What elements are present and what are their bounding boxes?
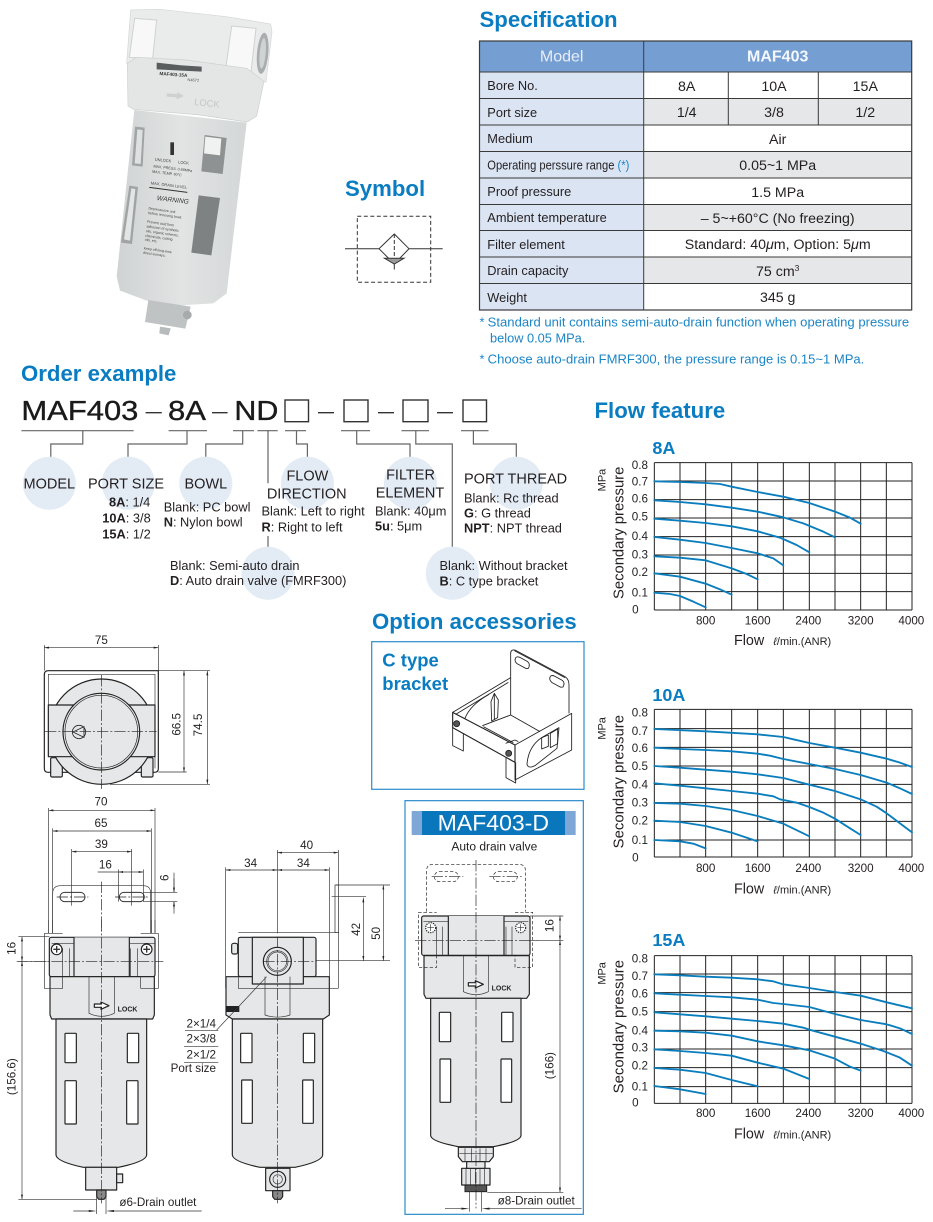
chart: 8A flow: MPa — [597, 468, 609, 491]
drawing: front view of filter — [5, 920, 202, 1214]
chart: 10A flow: 0.8 — [632, 707, 648, 720]
specification table: Proof pressure — [487, 184, 571, 199]
chart: 10A flow: ℓ/min.(ANR) — [772, 884, 831, 896]
dimensions: auto drain filter: (166) — [543, 1052, 556, 1079]
product photo: filter unit: adhesion of synthetic — [146, 224, 179, 233]
drawing: side view of filter: 2×1/4 — [186, 1017, 217, 1030]
order code: MAF403 — [21, 395, 138, 426]
drawing: side view of filter: 2×3/8 — [186, 1033, 216, 1046]
specification table: Model — [540, 48, 583, 66]
heading: Flow feature: Flow feature — [594, 398, 725, 423]
chart: 10A flow: 0.1 — [632, 834, 648, 847]
table footnotes — [480, 315, 909, 366]
chart: 8A flow: Flow — [734, 633, 765, 649]
specification table: Medium — [487, 131, 533, 146]
title band: MAF403-D — [412, 811, 576, 836]
panel: C type bracket: bracket — [382, 673, 448, 694]
chart: 8A flow: 0.8 — [632, 459, 648, 472]
product photo: filter unit: UNLOCK — [155, 157, 172, 163]
specification table: Air — [769, 132, 787, 148]
product photo: filter unit: MAX. DRAIN LEVEL — [151, 180, 188, 190]
heading: Specification: Specification — [480, 7, 618, 32]
specification table: Standard: 40μm, Option: 5μm — [685, 237, 871, 253]
chart: 10A flow: Flow — [734, 881, 765, 897]
chart: 8A flow: 8A — [652, 438, 675, 458]
table footnotes: Choose auto-drain FMRF300, the pressure range is 0.15~1 MPa. — [488, 351, 864, 366]
drawing: front view dimensions — [49, 796, 177, 933]
product photo: filter unit: N4672 — [187, 77, 200, 83]
specification table: 0.05~1 MPa — [739, 158, 816, 174]
chart: 8A flow: 0.4 — [632, 530, 649, 543]
order labels: Blank: Without bracket — [440, 558, 568, 573]
chart: 8A flow: 0.7 — [632, 475, 648, 488]
specification table: 3 — [795, 263, 800, 273]
product photo: filter unit — [117, 9, 272, 335]
order labels: R: Right to left — [262, 520, 343, 535]
order labels: 15A: 1/2 — [102, 526, 151, 541]
specification table: Weight — [487, 290, 527, 305]
order labels: Blank: Semi-auto drain — [170, 558, 299, 573]
panel: C type bracket: C type — [382, 650, 439, 671]
chart: 15A flow: 15A — [652, 930, 685, 950]
chart: 10A flow: 0.4 — [632, 779, 649, 792]
drawing: front view dimensions: 39 — [95, 838, 108, 851]
drawing: side view of filter — [171, 937, 338, 1203]
drawing: side view of filter: 2×1/2 — [186, 1048, 216, 1061]
order labels: FILTER — [386, 468, 435, 484]
heading: Symbol: Symbol — [345, 176, 425, 201]
drawing: side view with dimensions: 42 — [350, 923, 363, 936]
product photo: filter unit: Prevent acid from — [147, 220, 175, 227]
order labels: D: Auto drain valve (FMRF300) — [170, 573, 346, 588]
icon: filter symbol — [345, 216, 443, 282]
table footnotes: * — [480, 351, 484, 366]
drawing: front view dimensions: 16 — [99, 858, 112, 871]
chart: 8A flow: Secondary pressure — [611, 467, 627, 599]
specification table: Operating perssure range (*) — [487, 158, 629, 172]
drawing: side view with dimensions: 40 — [300, 839, 314, 852]
drawing: front view of filter: LOCK — [118, 1006, 137, 1013]
order code: ND — [234, 395, 278, 426]
panel: MAF403-D auto drain valve: Auto drain valve — [451, 840, 538, 854]
product photo: filter unit: MAF403-15A — [159, 71, 188, 78]
specification table: 15A — [853, 79, 878, 95]
specification table — [480, 41, 912, 310]
drawing: side view with dimensions: 34 — [244, 857, 258, 870]
heading: Option accessories: Option accessories — [372, 609, 577, 634]
chart: 10A flow: 0.2 — [632, 815, 648, 828]
specification table: 1.5 MPa — [751, 185, 804, 201]
product photo: filter unit: LOCK — [194, 97, 221, 110]
order labels: FLOW — [286, 468, 329, 484]
chart: 8A flow — [597, 438, 925, 649]
product photo: filter unit: LOCK — [178, 159, 190, 165]
drawing: front view of filter: ø6-Drain outlet — [119, 1196, 197, 1209]
chart: 8A flow: 0.1 — [632, 586, 648, 599]
specification table: Drain capacity — [487, 263, 569, 278]
order labels: DIRECTION — [267, 486, 347, 502]
chart: 15A flow: 1600 — [745, 1107, 771, 1120]
specification table: 3/8 — [764, 105, 784, 121]
product photo: filter unit: Keep off long-time — [144, 246, 172, 254]
panel: MAF403-D auto drain valve — [405, 801, 583, 1214]
title band: MAF403-D: MAF403-D — [438, 811, 549, 836]
icon: C type bracket drawing — [453, 650, 572, 783]
chart: 15A flow — [597, 930, 925, 1142]
specification table: MAF403 — [747, 48, 808, 66]
order labels: 5u: 5μm — [375, 519, 422, 534]
chart: 15A flow: 3200 — [848, 1107, 874, 1120]
order labels: ELEMENT — [376, 486, 444, 502]
drawing: front view of filter: 16 — [5, 942, 18, 955]
product photo: filter unit: chemicals, cutting — [145, 234, 173, 242]
specification table: 345 g — [760, 290, 795, 306]
order labels: 8A: 1/4 — [109, 494, 150, 510]
chart: 8A flow: 0 — [632, 604, 639, 617]
order labels: NPT: NPT thread — [464, 521, 562, 536]
dimensions: auto drain filter — [445, 916, 582, 1212]
specification table: – 5~+60°C (No freezing) — [701, 211, 855, 227]
specification table: 10A — [761, 79, 787, 95]
drawing: top view with dimensions: 66.5 — [170, 713, 183, 736]
product photo: filter unit: Depressurize unit — [148, 206, 176, 214]
chart: 15A flow: 2400 — [795, 1107, 822, 1120]
panel: C type bracket — [372, 642, 584, 789]
drawing: top view with dimensions: 74.5 — [192, 714, 205, 736]
order labels: Blank: Rc thread — [464, 491, 559, 506]
order labels: PORT THREAD — [464, 471, 567, 487]
chart: 10A flow: MPa — [597, 716, 609, 740]
chart: 15A flow: ℓ/min.(ANR) — [772, 1129, 831, 1141]
table footnotes: below 0.05 MPa. — [490, 331, 585, 346]
chart: 8A flow: 0.5 — [632, 511, 648, 524]
product photo: filter unit: MAX. PRESS. 0.88MPa — [153, 164, 193, 173]
chart: 15A flow: 0.1 — [632, 1080, 648, 1093]
order labels: MODEL — [24, 476, 75, 492]
chart: 10A flow: 3200 — [848, 862, 874, 875]
order example circles and connectors — [21, 431, 543, 600]
drawing: front view of filter: (156.6) — [5, 1058, 18, 1095]
chart: 15A flow: 0.6 — [632, 988, 648, 1001]
chart: 15A flow: 0.8 — [632, 952, 648, 965]
order code: 8A — [168, 395, 206, 426]
chart: 10A flow: 0.7 — [632, 725, 648, 738]
chart: 10A flow: Secondary pressure — [611, 715, 627, 848]
chart: 10A flow: 2400 — [795, 862, 822, 875]
drawing: front view dimensions: 65 — [95, 817, 107, 830]
drawing: auto drain filter front view — [415, 860, 538, 1208]
product photo: filter unit: direct sunrays. — [143, 251, 166, 258]
specification table: Filter element — [487, 237, 565, 252]
drawing: auto drain filter front view: LOCK — [492, 985, 511, 992]
chart: 8A flow: 800 — [696, 614, 716, 627]
table footnotes: * — [480, 315, 484, 330]
chart: 8A flow: ℓ/min.(ANR) — [772, 636, 831, 648]
product photo: filter unit: before removing bowl. — [148, 211, 182, 220]
chart: 15A flow: Flow — [734, 1126, 765, 1142]
chart: 10A flow: 0 — [632, 851, 639, 864]
drawing: side view with dimensions: 50 — [370, 926, 383, 940]
chart: 10A flow: 0.3 — [632, 797, 648, 810]
order labels: B: C type bracket — [440, 574, 539, 589]
specification table: 75 cm — [756, 264, 795, 280]
dimensions: auto drain filter: ø8-Drain outlet — [498, 1194, 576, 1207]
chart: 8A flow: 4000 — [898, 614, 925, 627]
chart: 15A flow: MPa — [597, 961, 609, 985]
drawing: side view with dimensions — [226, 839, 390, 988]
order labels: 10A: 3/8 — [102, 510, 151, 526]
chart: 8A flow: 0.2 — [632, 566, 648, 579]
product photo: filter unit: MAX. TEMP. 60°C — [152, 170, 182, 177]
drawing: front view dimensions: 6 — [159, 875, 172, 881]
chart: 15A flow: 0.4 — [632, 1024, 649, 1037]
chart: 15A flow: 4000 — [898, 1107, 925, 1120]
chart: 10A flow: 800 — [696, 862, 716, 875]
order labels: Blank: PC bowl — [164, 500, 250, 515]
chart: 10A flow: 0.6 — [632, 742, 648, 755]
chart: 15A flow: 0.2 — [632, 1060, 648, 1073]
drawing: side view with dimensions: 34 — [297, 857, 310, 870]
specification table: Bore No. — [487, 78, 538, 93]
chart: 15A flow: Secondary pressure — [611, 960, 627, 1093]
order labels — [24, 468, 568, 589]
order labels: G: G thread — [464, 506, 531, 521]
table footnotes: Standard unit contains semi-auto-drain function when operating pressure — [488, 315, 909, 330]
chart: 8A flow: 1600 — [745, 614, 771, 627]
order code — [21, 395, 487, 426]
order labels: Blank: 40μm — [375, 504, 446, 519]
dimensions: auto drain filter: 16 — [543, 919, 556, 932]
order labels: PORT SIZE — [88, 476, 164, 492]
drawing: side view of filter: Port size — [171, 1062, 216, 1075]
chart: 8A flow: 3200 — [848, 614, 874, 627]
chart: 8A flow: 0.6 — [632, 493, 648, 506]
drawing: top view with dimensions: 75 — [95, 634, 108, 647]
heading: Order example: Order example — [21, 361, 176, 386]
chart: 15A flow: 800 — [696, 1107, 716, 1120]
specification table: 1/4 — [677, 105, 697, 121]
specification table: 1/2 — [855, 105, 875, 121]
product photo: filter unit: WARNING — [156, 195, 189, 206]
drawing: front view dimensions: 70 — [95, 796, 108, 809]
specification table: Port size — [487, 105, 537, 120]
chart: 15A flow: 0.3 — [632, 1042, 648, 1055]
specification table: 8A — [678, 79, 696, 95]
drawing: top view with dimensions — [44, 634, 210, 789]
product photo: filter unit: oils, organic solvents, — [146, 229, 179, 238]
chart: 10A flow: 1600 — [745, 862, 771, 875]
product photo: filter unit: oils, etc. — [145, 238, 158, 243]
chart: 15A flow: 0.7 — [632, 970, 648, 983]
chart: 8A flow: 0.3 — [632, 549, 648, 562]
order labels: BOWL — [184, 476, 227, 492]
chart: 8A flow: 2400 — [795, 614, 822, 627]
chart: 15A flow: 0.5 — [632, 1006, 648, 1019]
chart: 10A flow — [597, 685, 925, 897]
chart: 10A flow: 0.5 — [632, 760, 648, 773]
chart: 15A flow: 0 — [632, 1097, 639, 1110]
order labels: Blank: Left to right — [262, 504, 365, 519]
chart: 10A flow: 4000 — [898, 862, 925, 875]
specification table: Ambient temperature — [487, 210, 607, 225]
chart: 10A flow: 10A — [652, 685, 685, 705]
order labels: N: Nylon bowl — [164, 515, 243, 530]
